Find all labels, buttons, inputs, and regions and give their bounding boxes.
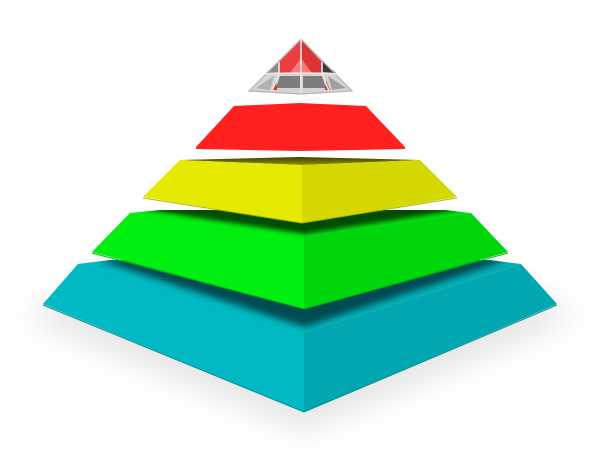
teal right face [304, 264, 557, 412]
green left face [92, 210, 304, 309]
teal right top band [304, 260, 521, 333]
ground shadow [22, 285, 580, 430]
pyramid capstone: glass [249, 39, 352, 94]
yellow left face [143, 160, 302, 223]
shadow cast by yellow level [142, 210, 462, 238]
pyramid level 1: teal base [42, 260, 558, 412]
yellow top shadow [180, 157, 420, 165]
green right face [304, 213, 508, 309]
green right top band [304, 210, 471, 237]
pyramid infographic [39, 38, 563, 432]
pyramid level 2: green [92, 210, 508, 310]
shadow cast by green level [98, 260, 507, 331]
yellow right face [302, 160, 457, 223]
pyramid level 4: red [196, 103, 405, 151]
pyramid level 3: yellow [143, 157, 457, 223]
teal left face [43, 260, 304, 412]
